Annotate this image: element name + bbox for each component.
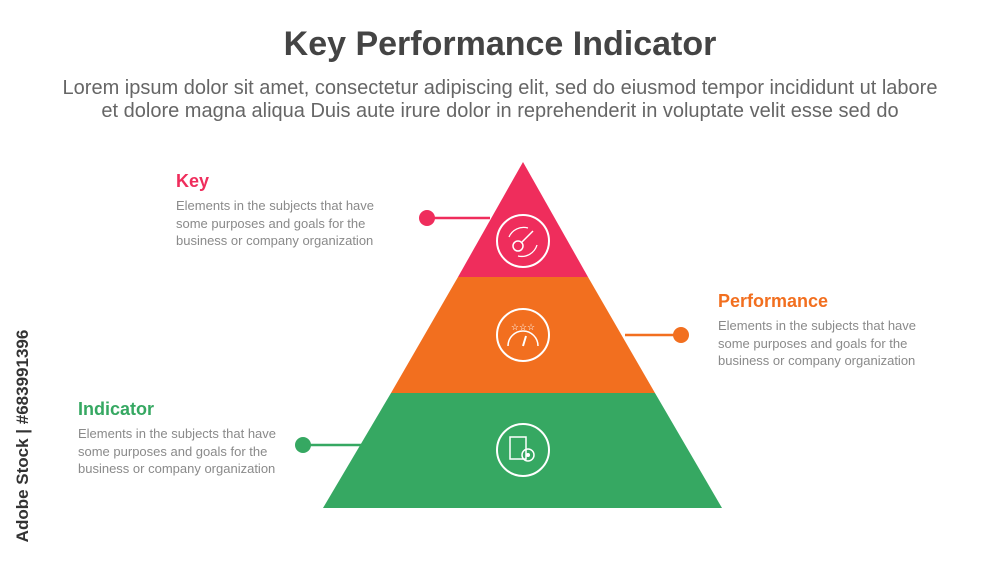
tier: key — [419, 162, 588, 277]
subtitle: et dolore magna aliqua Duis aute irure dolor in reprehenderit in voluptate velit esse sed do — [101, 100, 899, 122]
text block: performance — [718, 291, 916, 368]
watermark side text: Adobe Stock | #683991396 — [13, 330, 32, 542]
text block: key: Key — [176, 171, 209, 191]
tier: indicator — [295, 393, 722, 508]
tier: performance: ☆☆☆ — [511, 322, 535, 332]
text block: performance: Elements in the subjects that have some purposes and goals for the business or company organization — [718, 318, 916, 368]
text block: indicator — [78, 399, 276, 476]
text block: key: Elements in the subjects that have some purposes and goals for the business or company organization — [176, 198, 374, 248]
text block: indicator: Indicator — [78, 399, 154, 419]
title: Key Performance Indicator — [284, 25, 716, 63]
text block: indicator: Elements in the subjects that have some purposes and goals for the business or company organization — [78, 426, 276, 476]
subtitle: Lorem ipsum dolor sit amet, consectetur adipiscing elit, sed do eiusmod tempor incididunt ut labore — [63, 77, 937, 99]
text block: key — [176, 171, 374, 248]
subtitle — [63, 77, 937, 122]
tier: performance — [391, 277, 689, 393]
text block: performance: Performance — [718, 291, 828, 311]
